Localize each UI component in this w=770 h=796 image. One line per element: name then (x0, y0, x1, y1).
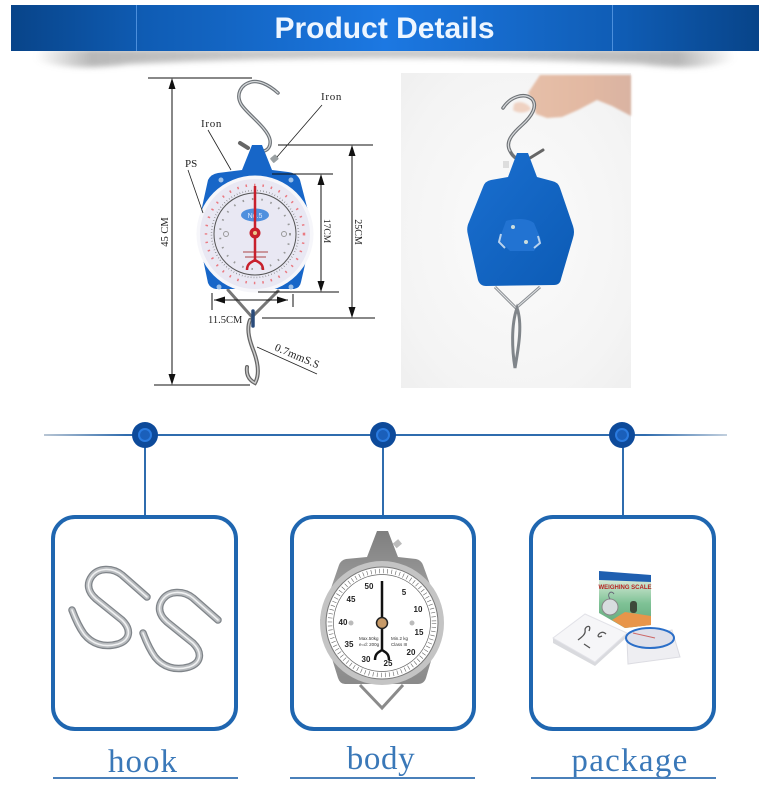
dimension labels: 25CM (352, 219, 363, 245)
foam tray with scale (627, 630, 680, 664)
foam tray with hooks (553, 633, 627, 666)
hand (513, 75, 631, 118)
photo background (401, 73, 631, 388)
label: body: body (347, 741, 415, 777)
label: package: package (571, 743, 689, 779)
heading: Product Details (274, 12, 495, 45)
icon: silver scale (320, 531, 444, 708)
dial specs: e=d: 200g (359, 642, 380, 647)
icon: package contents: WEIGHING SCALE (598, 585, 652, 591)
dial specs: Max.50kg (359, 636, 379, 641)
dial numbers: 5 (402, 588, 407, 597)
dimension arrowheads (168, 78, 356, 385)
icon: package contents (553, 571, 680, 666)
dial numbers: 10 (414, 605, 423, 614)
banner shadow (35, 49, 735, 67)
dimension diagram of scale (148, 78, 375, 385)
lower frame and hook (495, 287, 540, 368)
panel: hook (53, 517, 238, 780)
dimension labels: Iron (201, 118, 222, 130)
timeline node: package (609, 422, 635, 448)
card frame (292, 517, 474, 729)
dimension labels (160, 91, 363, 371)
dimension labels: 0.7mmS.S (273, 342, 321, 371)
leader lines (188, 105, 322, 374)
needle (375, 581, 389, 660)
dial numbers: 45 (347, 595, 356, 604)
dial face: No.5 (248, 213, 262, 220)
dial face (196, 176, 314, 292)
photo: hand holding scale, rear view (401, 73, 631, 388)
card frame (53, 517, 236, 729)
dial numbers: 50 (365, 582, 374, 591)
rear hub (499, 219, 541, 251)
retail box (599, 573, 651, 628)
dial numbers: 35 (345, 640, 354, 649)
dial specs (359, 636, 409, 647)
upper hook (503, 96, 543, 158)
dimension labels: 45 CM (160, 217, 171, 247)
icon: S hooks (72, 569, 218, 669)
dial specs: Min.2 kg (391, 636, 409, 641)
dial numbers: 30 (362, 655, 371, 664)
dimension labels: Iron (321, 91, 342, 103)
dimension labels: PS (185, 158, 197, 170)
dial numbers: 15 (415, 628, 424, 637)
card frame (531, 517, 714, 729)
timeline connector (44, 422, 727, 516)
dimension labels: 17CM (321, 219, 331, 244)
dial numbers: 20 (407, 648, 416, 657)
timeline node: body (370, 422, 396, 448)
dial specs: Class III (391, 642, 407, 647)
dimension lines (148, 78, 375, 385)
panel: body (290, 517, 475, 779)
title banner (11, 5, 759, 67)
banner bar (11, 5, 759, 51)
dial numbers (339, 582, 424, 668)
dial numbers: 40 (339, 618, 348, 627)
dial numbers: 25 (384, 659, 393, 668)
hanging hooks and frame (228, 81, 278, 383)
blue back of scale (467, 153, 574, 286)
label: hook: hook (108, 744, 178, 780)
dimension labels: 11.5CM (208, 315, 243, 326)
scale body (197, 145, 313, 289)
timeline node: hook (132, 422, 158, 448)
panel: package (531, 517, 716, 779)
